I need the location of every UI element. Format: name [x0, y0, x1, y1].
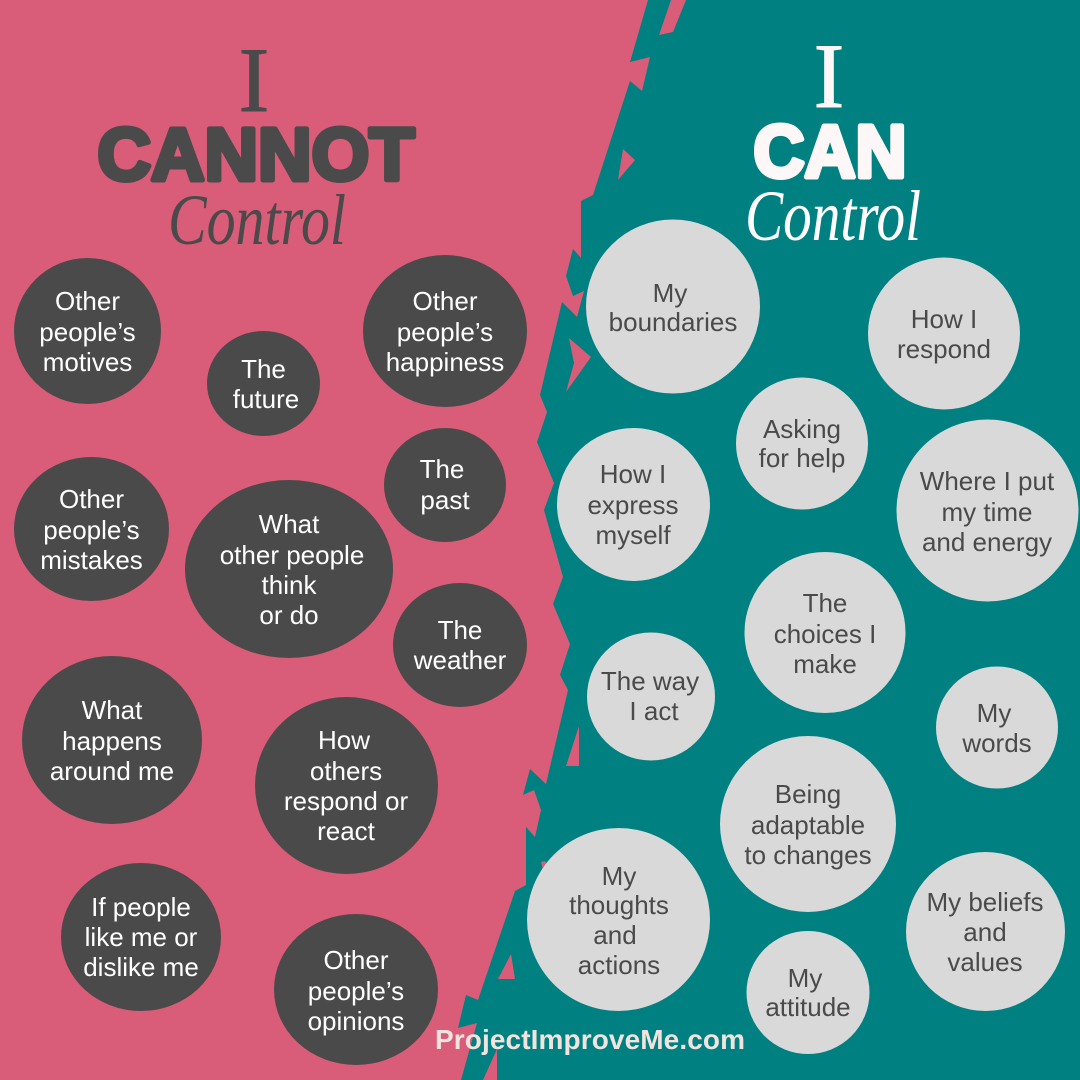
circle: asking for help: [736, 378, 868, 510]
circle: what other people think or do: [185, 480, 393, 658]
circle: my words: words: [961, 728, 1032, 758]
circle: the way I act: I act: [629, 696, 679, 726]
circle: where I put my time and energy: my time: [942, 497, 1032, 527]
circle: other people's mistakes: mistakes: [40, 545, 143, 575]
heading: I cannot control: [98, 29, 414, 260]
heading: I cannot control: I: [239, 29, 269, 131]
circle: other people's opinions: Other: [323, 945, 389, 975]
circle: the way I act: [587, 632, 715, 760]
circle: what happens around me: around me: [50, 756, 174, 786]
circle: if people like me or dislike me: [61, 863, 221, 1011]
heading: I can control: CAN: [754, 110, 906, 193]
circle: how I express myself: myself: [595, 520, 671, 550]
circle: asking for help: Asking: [763, 414, 841, 444]
circle: my attitude: attitude: [765, 992, 851, 1022]
footer website text: ProjectImproveMe.com: [435, 1024, 745, 1055]
circle: other people's motives: Other: [55, 286, 120, 316]
circle: being adaptable to changes: [720, 736, 896, 912]
heading: I can control: Control: [745, 176, 921, 256]
circle: how others respond or react: How: [318, 725, 370, 755]
circle: the past: The: [420, 454, 464, 484]
circle: other people's mistakes: people’s: [43, 515, 140, 545]
circle: my thoughts and actions: thoughts: [569, 890, 669, 920]
circle: the weather: [393, 583, 527, 707]
circle: asking for help: for help: [759, 443, 845, 473]
circle: my boundaries: [586, 220, 760, 394]
circle: other people's mistakes: [14, 457, 169, 601]
circle: other people's opinions: people’s: [308, 976, 404, 1006]
circle: my boundaries: My: [653, 278, 687, 308]
circle: my thoughts and actions: [527, 828, 710, 1011]
circle: my beliefs and values: values: [947, 947, 1023, 977]
circle: how others respond or react: [255, 697, 438, 874]
circle: how I respond: respond: [897, 334, 991, 364]
panel: pink I cannot control background: [0, 0, 686, 1080]
circle: if people like me or dislike me: like me or: [85, 922, 198, 952]
circle: other people's mistakes: Other: [59, 484, 124, 514]
circle: my beliefs and values: My beliefs: [926, 887, 1044, 917]
heading: I can control: I: [814, 25, 844, 127]
circle: how I respond: [868, 258, 1020, 410]
circle: other people's happiness: Other: [412, 286, 478, 316]
circle: the choices I make: [744, 552, 906, 713]
circle: my attitude: [746, 931, 870, 1054]
circle: other people's happiness: people’s: [397, 317, 493, 347]
circle: what other people think or do: What: [259, 509, 320, 539]
circle: other people's motives: people’s: [39, 317, 136, 347]
circle: the past: past: [420, 485, 470, 515]
circle: how I express myself: express: [587, 490, 679, 520]
circle: where I put my time and energy: and energy: [922, 527, 1052, 557]
circle: other people's motives: [14, 258, 161, 404]
circle: being adaptable to changes: adaptable: [751, 810, 865, 840]
circle: what happens around me: [22, 656, 202, 824]
circle: my boundaries: boundaries: [609, 307, 737, 337]
circle: other people's happiness: happiness: [386, 347, 504, 377]
circle: other people's happiness: [363, 255, 527, 407]
circle: other people's opinions: [274, 914, 438, 1065]
circle: my attitude: My: [788, 963, 822, 993]
circle: my words: [936, 666, 1058, 788]
circle: what other people think or do: or do: [259, 600, 319, 630]
circle: my thoughts and actions: My: [602, 861, 636, 891]
circle: the past: [384, 428, 506, 542]
circle: the choices I make: choices I: [774, 619, 876, 649]
circle: what happens around me: What: [82, 695, 143, 725]
circle: the weather: weather: [413, 645, 507, 675]
heading: I cannot control: CANNOT: [98, 113, 414, 196]
circle: how I express myself: How I: [600, 459, 666, 489]
circle: my thoughts and actions: actions: [578, 950, 660, 980]
circle: my thoughts and actions: and: [593, 920, 637, 950]
circle: my beliefs and values: and: [963, 917, 1007, 947]
circle: the future: The: [241, 354, 286, 384]
circle: if people like me or dislike me: If people: [91, 892, 191, 922]
circle: how others respond or react: respond or: [284, 786, 408, 816]
circle: how others respond or react: others: [310, 756, 382, 786]
circle: my beliefs and values: [906, 852, 1065, 1011]
heading: I can control: [745, 25, 921, 256]
circle: where I put my time and energy: Where I put: [920, 466, 1055, 496]
circle: the choices I make: The: [803, 588, 847, 618]
circle: how I express myself: [557, 428, 710, 581]
circle: how I respond: How I: [911, 304, 977, 334]
circle: my words: My: [977, 698, 1011, 728]
circle: the choices I make: make: [793, 649, 857, 679]
circle: what other people think or do: other people: [220, 540, 364, 570]
circle: other people's opinions: opinions: [308, 1006, 404, 1036]
circle: the weather: The: [438, 615, 482, 645]
circle: how others respond or react: react: [317, 816, 376, 846]
circle: other people's motives: motives: [43, 347, 132, 377]
circle: what happens around me: happens: [62, 726, 162, 756]
circle: the future: future: [233, 384, 299, 414]
circle: being adaptable to changes: Being: [775, 779, 841, 809]
circle: the future: [207, 331, 320, 436]
circle: being adaptable to changes: to changes: [744, 840, 872, 870]
circle: if people like me or dislike me: dislike me: [83, 952, 199, 982]
circle: where I put my time and energy: [896, 420, 1078, 602]
circle: what other people think or do: think: [262, 570, 317, 600]
circle: the way I act: The way: [601, 666, 699, 696]
heading: I cannot control: Control: [168, 180, 346, 260]
